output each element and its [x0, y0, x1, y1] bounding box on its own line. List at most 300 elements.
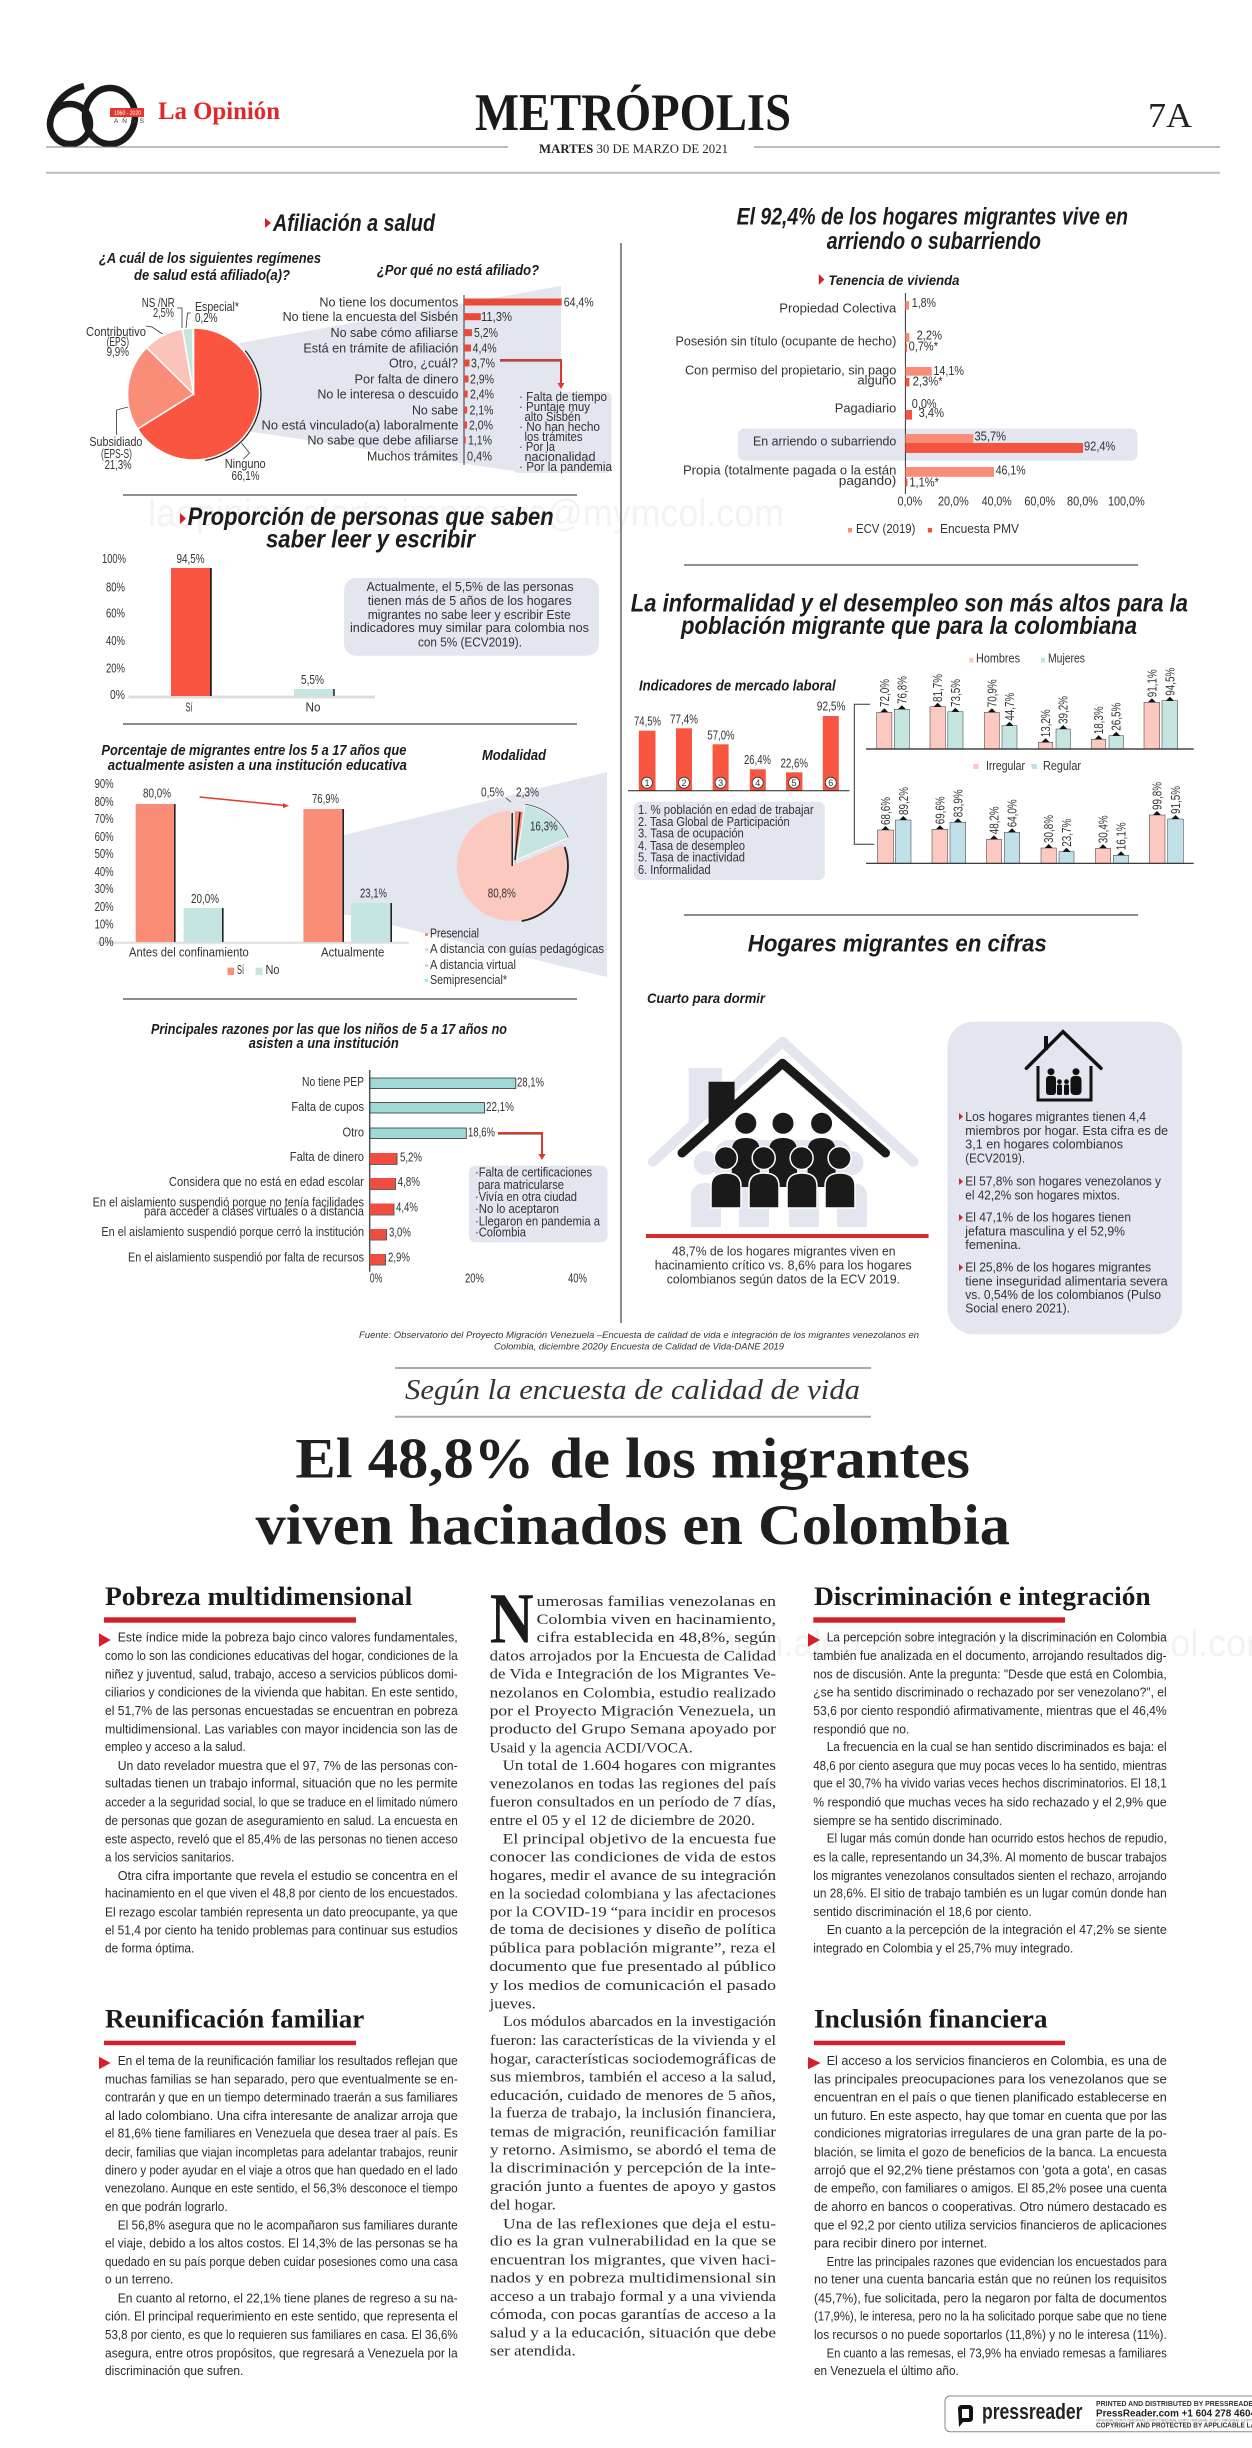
bar chart: por qué no está afiliado: No sabe que debe afiliarse — [307, 434, 458, 448]
body text: Un total de 1.604 hogares con migrantes — [503, 1758, 776, 1774]
body text: cómoda, con pocas garantías de acceso a la — [490, 2307, 776, 2323]
pie chart: regímenes de salud: 2,5% — [153, 306, 174, 320]
body text: El lugar más común donde han ocurrido estos hechos de repudio, — [827, 1831, 1167, 1846]
bar chart: hombres y mujeres: 76,8% — [895, 676, 909, 704]
bar chart: por qué no está afiliado — [262, 295, 594, 465]
pie chart: regímenes de salud: 66,1% — [232, 469, 260, 483]
callout: otras razones: ·Vivía en otra ciudad — [475, 1190, 577, 1204]
body text: respondió que no. — [813, 1721, 909, 1736]
bar chart: tenencia: Posesión sin título (ocupante de hecho) — [676, 335, 896, 349]
bar chart: sabe leer y escribir: 40% — [106, 634, 125, 648]
bar chart: por qué no está afiliado: Muchos trámites — [367, 450, 458, 464]
body text: temas de migración, reunificación familiar — [490, 2125, 776, 2141]
body text: producto del Grupo Semana apoyado por — [490, 1721, 776, 1737]
body text: 53,8 por ciento, es que lo requieren sus familiares en casa. El 36,6% — [105, 2327, 458, 2342]
bar chart: tenencia: 2,2% — [917, 328, 942, 342]
body text: como lo son las condiciones educativas del hogar, condiciones de la — [105, 1648, 458, 1663]
arrow: descenso — [200, 797, 289, 808]
drop cap: N — [490, 1579, 534, 1659]
legend: modalidad — [425, 927, 604, 987]
callout: otras razones: alto Sisbén — [524, 410, 581, 424]
headline block — [256, 1368, 1010, 1557]
bar chart: hombres y mujeres: 72,0% — [878, 679, 892, 707]
body text: sultadas tienen un trabajo informal, situación que no les permite — [105, 1776, 458, 1791]
main title: El 48,8% de los migrantes — [295, 1428, 970, 1491]
body text: de ahorro en bancos o cooperativas. Otro número destacado es — [814, 2199, 1167, 2214]
text: hacinamiento crítico: colombianos según datos de la ECV 2019. — [667, 1271, 900, 1286]
body text: por la COVID-19 “para incidir en procesos — [490, 1905, 776, 1921]
body text — [105, 2053, 458, 2378]
body text: en Venezuela el último año. — [814, 2363, 959, 2378]
body text: en la sociedad colombiana y las afectaciones — [490, 1886, 776, 1902]
bar chart: asistencia: 20% — [95, 900, 114, 914]
bar chart: asistencia: Actualmente — [321, 946, 384, 960]
callout: otras razones: · Puntaje muy — [519, 400, 591, 414]
bar chart: indicadores de mercado laboral — [628, 700, 850, 791]
bar chart: tenencia: 40,0% — [982, 494, 1012, 508]
body text: los migrantes venezolanos consultados sienten el rechazo, arrojando — [813, 1868, 1167, 1883]
text: jefatura del hogar: femenina. — [965, 1237, 1021, 1252]
bar chart: asistencia: No — [266, 963, 280, 977]
bar chart: por qué no está afiliado: 0,4% — [467, 450, 492, 464]
bar chart: tenencia: 80,0% — [1067, 494, 1098, 508]
legend box: indicadores: 1. % población en edad de trabajar — [638, 803, 814, 817]
bar chart: por qué no está afiliado: 1,1% — [468, 434, 492, 448]
bar chart: por qué no está afiliado: 3,7% — [471, 356, 495, 370]
logo: 60 años — [50, 86, 145, 144]
bar chart: irregular y regular: 69,6% — [933, 796, 947, 824]
bar chart: tenencia — [676, 293, 1145, 508]
bar chart: tenencia: 46,1% — [996, 463, 1026, 477]
bar chart: sabe leer y escribir: 20% — [106, 662, 125, 676]
body text: Este índice mide la pobreza bajo cinco valores fundamentales, — [118, 1630, 458, 1645]
body text: sentido discriminación el 18,6 por ciento. — [813, 1904, 1032, 1919]
bar chart: indicadores de mercado laboral: 6 — [828, 778, 833, 788]
body text: la fuerza de trabajo, la inclusión financiera, — [490, 2106, 776, 2122]
bar chart: hombres y mujeres: 91,1% — [1145, 669, 1159, 697]
subheading: regímenes — [99, 250, 321, 284]
heading: proporción de personas — [180, 503, 554, 554]
body text: educación, cuidado de menores de 5 años, — [490, 2088, 776, 2104]
body text: contrarán y que en un tiempo determinado traerán a sus familiares — [105, 2090, 458, 2105]
bar chart: por qué no está afiliado: 4,4% — [473, 342, 497, 356]
pie chart: modalidad: 0,5% — [481, 786, 504, 800]
text: miembros por hogar: (ECV2019). — [965, 1151, 1025, 1166]
body text: Entre las principales razones que evidencian los encuestados para — [827, 2254, 1167, 2269]
icon: arrow — [99, 1633, 111, 1647]
bar chart: razones: No tiene PEP — [302, 1075, 364, 1089]
body text: documento que fue presentado al público — [490, 1959, 776, 1975]
pressreader notice — [1096, 2399, 1252, 2429]
heading: hogares migrantes: Hogares migrantes en cifras — [748, 931, 1047, 958]
bar chart: indicadores de mercado laboral: 1 — [644, 778, 650, 788]
heading: porcentaje de migrantes — [101, 742, 407, 774]
text: inseguridad alimentaria — [959, 1260, 1168, 1316]
text: jefatura del hogar: jefatura masculina y el 52,9% — [964, 1223, 1125, 1238]
body text: Colombia viven en hacinamiento, — [537, 1612, 776, 1628]
body text: gración junto a fuentes de apoyo y gastos — [490, 2179, 776, 2195]
body text: entre el 05 y el 12 de diciembre de 2020. — [490, 1813, 755, 1829]
body text: nezolanos en Colombia, estudio realizado — [490, 1686, 776, 1702]
panel: tenencia de vivienda — [676, 203, 1145, 536]
bar chart: asistencia: 40% — [95, 865, 114, 879]
body text: ción. El principal requerimiento en este sentido, que representa el — [105, 2309, 458, 2324]
bar chart: hombres y mujeres: 81,7% — [931, 674, 945, 702]
bar chart: por qué no está afiliado: No le interesa o descuido — [317, 388, 458, 402]
text: jefatura del hogar: El 47,1% de los hogares tienen — [965, 1210, 1131, 1225]
legend: modalidad: Presencial — [430, 927, 479, 941]
heading: proporción de personas: Proporción de personas que saben — [188, 503, 554, 531]
body text: fueron: las características de la vivienda y el — [490, 2033, 776, 2049]
body text: es la calle, representando un 34,3%. Al momento de buscar trabajos — [813, 1850, 1167, 1865]
bar chart: indicadores de mercado laboral: 2 — [682, 778, 687, 788]
body text: nados y en pobreza multidimensional sin — [490, 2271, 777, 2287]
body text: El 56,8% asegura que no le acompañaron sus familiares durante — [118, 2217, 458, 2232]
article: reunificación familiar — [99, 2004, 458, 2378]
callout: otras razones: nacionalidad — [524, 450, 596, 464]
bar chart: tenencia: 1,1%* — [909, 475, 939, 489]
callout: otras razones — [469, 1166, 608, 1242]
bar chart: sabe leer y escribir: 60% — [106, 607, 125, 621]
main title — [256, 1428, 1010, 1557]
bar chart: asistencia: 30% — [95, 882, 114, 896]
body text: que el 30,7% ha vivido varias veces hechos discriminatorios. El 18,1 — [813, 1776, 1167, 1791]
bar chart: hombres y mujeres: 44,7% — [1003, 693, 1017, 721]
heading: Afiliación a salud: Afiliación a salud — [272, 210, 436, 237]
callout: 5,5% no sabe leer: Actualmente, el 5,5% de las personas — [366, 579, 574, 594]
body text: nos de discusión. Ante la pregunta: "Desde que está en Colombia, — [813, 1666, 1167, 1681]
bar chart: razones: Falta de cupos — [291, 1100, 364, 1114]
bar chart: por qué no está afiliado: Otro, ¿cuál? — [389, 356, 458, 370]
bar chart: indicadores de mercado laboral: 74,5% — [634, 715, 661, 729]
body text: El principal objetivo de la encuesta fue — [503, 1831, 776, 1847]
body text: salud y a la educación, situación que debe — [490, 2325, 776, 2341]
callout: 5,5% no sabe leer: con 5% (ECV2019). — [418, 635, 522, 650]
pie chart: regímenes de salud: Ninguno — [225, 457, 266, 471]
bar chart: por qué no está afiliado: 2,1% — [470, 404, 494, 418]
bar chart: tenencia: 14,1% — [933, 364, 964, 378]
body text — [489, 1594, 777, 2360]
body text: hacinamiento en el que viven el 48,8 por ciento de los encuestados. — [105, 1885, 458, 1900]
bar chart: hombres y mujeres: 26,5% — [1110, 703, 1124, 731]
heading: Reunificación familiar — [105, 2004, 364, 2033]
body text: siempre se ha sentido discriminado. — [813, 1813, 1002, 1828]
bar chart: irregular y regular: Irregular — [986, 759, 1025, 773]
text: miembros por hogar: miembros por hogar. Esta cifra es de — [965, 1123, 1168, 1138]
body text: decir, familias que viajan incompletas para adelantar trabajos, reunir — [105, 2145, 458, 2160]
bar chart: por qué no está afiliado: No sabe — [412, 404, 458, 418]
bar chart: asistencia: 76,9% — [312, 792, 339, 806]
body text: este aspecto, reveló que el 85,4% de las personas no tienen acceso — [105, 1831, 458, 1846]
bar chart: tenencia: pagando) — [839, 474, 896, 488]
heading: principales razones: asisten a una institución — [249, 1035, 399, 1052]
bar chart: tenencia: 92,4% — [1084, 440, 1115, 454]
legend: modalidad: Semipresencial* — [430, 973, 507, 987]
body text: Una de las reflexiones que deja el estu- — [503, 2216, 776, 2232]
bar chart: tenencia: Propiedad Colectiva — [779, 302, 896, 316]
bar chart: por qué no está afiliado: No sabe cómo afiliarse — [330, 326, 458, 340]
body text: condiciones migratorias irregulares de una gran parte de la po- — [814, 2126, 1167, 2141]
bar chart: asistencia: 10% — [95, 918, 114, 932]
bar chart: sabe leer y escribir — [102, 552, 375, 715]
bar chart: razones: 40% — [568, 1272, 587, 1286]
heading: principales razones — [151, 1021, 507, 1052]
bar chart: asistencia: Sí — [237, 963, 244, 977]
bar chart: tenencia: Propia (totalmente pagada o la están — [683, 463, 896, 477]
body text — [105, 1630, 458, 1956]
pie chart: modalidad: 2,3% — [516, 786, 539, 800]
bar chart: sabe leer y escribir: 0% — [110, 688, 125, 702]
icon: pressreader pin — [958, 2405, 973, 2427]
bar chart: tenencia: 2,3%* — [913, 375, 943, 389]
body text: ciliarios y condiciones de la vivienda que habitan. En este sentido, — [105, 1685, 458, 1700]
body text: el 51,7% de las personas encuestadas se encuentran en pobreza — [105, 1703, 458, 1718]
section title: Metrópolis: METRÓPOLIS — [475, 84, 791, 142]
callout: 5,5% no sabe leer — [344, 578, 599, 656]
legend box: indicadores: 3. Tasa de ocupación — [638, 826, 744, 840]
body text: a los servicios sanitarios. — [105, 1850, 234, 1865]
callout: 5,5% no sabe leer: indicadores muy similar para colombia nos — [350, 620, 589, 635]
bar chart: irregular y regular — [866, 759, 1194, 863]
body text — [814, 2053, 1168, 2378]
body text: del hogar. — [490, 2197, 556, 2213]
body text: arrojó que el 92,2% tiene préstamos con 'gota a gota', en casas — [814, 2162, 1167, 2177]
pie chart: regímenes de salud: 21,3% — [105, 458, 132, 472]
panel: informalidad y desempleo — [628, 590, 1194, 880]
body text: dinero y poder ayudar en el viaje a otros que han quedado en el lado — [105, 2162, 458, 2177]
callout: otras razones: · Por la pandemia — [519, 460, 612, 474]
bar chart: razones: En el aislamiento suspendió porque cerró la institución — [101, 1225, 364, 1239]
body text: acceso a un trabajo formal y a una vivienda — [490, 2289, 776, 2305]
page number: 7A — [1148, 96, 1193, 135]
bar chart: asistencia — [95, 777, 409, 977]
body text: 53,6 por ciento respondió afirmativamente, mientras que el 46,4% — [813, 1703, 1167, 1718]
body text: En cuanto a la percepción de la integración el 47,2% se siente — [827, 1922, 1167, 1937]
bar chart: por qué no está afiliado: No tiene la encuesta del Sisbén — [283, 310, 458, 324]
body text: el 81,6% tiene familiares en Venezuela que desea traer al país. Es — [105, 2126, 458, 2141]
bar chart: indicadores de mercado laboral: 92,5% — [817, 700, 846, 714]
bar chart: hombres y mujeres: 73,5% — [949, 679, 963, 707]
bar chart: razones: 20% — [465, 1272, 484, 1286]
body text: discriminación que sufren. — [105, 2363, 243, 2378]
heading: porcentaje de migrantes: actualmente asisten a una institución educativa — [108, 757, 407, 774]
bar chart: sabe leer y escribir: 94,5% — [176, 552, 204, 566]
heading: 92,4% de los hogares — [737, 203, 1128, 255]
bar chart: asistencia: 70% — [95, 812, 114, 826]
bar chart: tenencia: 0,0% — [898, 494, 922, 508]
bar chart: asistencia: 0% — [99, 935, 114, 949]
bar chart: sabe leer y escribir: Sí — [186, 701, 193, 715]
bar chart: sabe leer y escribir: No — [306, 701, 321, 715]
body text: El acceso a los servicios financieros en Colombia, es una de — [827, 2053, 1167, 2068]
body text: conocer las condiciones de vida de estos — [490, 1850, 776, 1866]
body text: pública para población migrante”, reza el — [490, 1941, 776, 1957]
body text: ser atendida. — [490, 2344, 576, 2360]
heading: informalidad: La informalidad y el desempleo son más altos para la — [631, 590, 1188, 618]
bar chart: razones: En el aislamiento suspendió por falta de recursos — [128, 1251, 364, 1265]
panel: razones de inasistencia — [93, 1021, 608, 1286]
bar chart: tenencia: 100,0% — [1108, 494, 1145, 508]
subheading: por qué no está afiliado: ¿Por qué no está afiliado? — [377, 262, 539, 279]
bar chart: asistencia: Antes del confinamiento — [129, 946, 249, 960]
bar chart: asistencia: 50% — [95, 847, 114, 861]
body text: % respondió que muchas veces ha sido rechazado y el 2,9% que — [813, 1795, 1167, 1810]
body text: hogares, medir el avance de su integración — [490, 1868, 777, 1884]
body text: dio es la gran vulnerabilidad en la que se — [490, 2234, 776, 2250]
body text: en que podrán lograrlo. — [105, 2199, 228, 2214]
body text: blación, se limita el gozo de beneficios de la banca. La encuesta — [814, 2145, 1168, 2160]
legend box: indicadores: 4. Tasa de desempleo — [638, 839, 745, 853]
text: hogares venezolanos y mixtos: El 57,8% son hogares venezolanos y — [965, 1174, 1161, 1189]
heading: 92,4% de los hogares: arriendo o subarriendo — [827, 228, 1041, 255]
bar chart: por qué no está afiliado: 11,3% — [481, 310, 512, 324]
text: inseguridad alimentaria: Social enero 2021). — [965, 1301, 1070, 1316]
bar chart: por qué no está afiliado: 2,9% — [470, 372, 494, 386]
pie chart: regímenes de salud: (EPS-S) — [101, 447, 132, 461]
body text: quedado en su país porque deben cuidar posesiones como una casa — [105, 2254, 458, 2269]
bar chart: irregular y regular: 99,8% — [1150, 782, 1164, 810]
heading: Inclusión financiera — [814, 2004, 1048, 2033]
logo: 60 años: 1960 - 2020 — [114, 111, 142, 117]
legend: modalidad: A distancia con guías pedagógicas — [430, 942, 604, 956]
body text: Otra cifra importante que revela el estudio se concentra en el — [118, 1868, 458, 1883]
body text: Un dato revelador muestra que el 97, 7% de las personas con- — [118, 1758, 458, 1773]
bar chart: razones: 28,1% — [517, 1076, 544, 1090]
body text: hogar, características sociodemográficas de — [490, 2051, 776, 2067]
icon: casa con familia — [1026, 1032, 1101, 1100]
icon: casa con personas — [653, 1042, 913, 1227]
legend: tenencia: ECV (2019) — [856, 522, 915, 536]
callout: otras razones — [513, 390, 612, 474]
source note: Colombia, diciembre 2020y Encuesta de Calidad de Vida-DANE 2019 — [494, 1342, 785, 1352]
legend box: indicadores: 5. Tasa de inactividad — [638, 851, 745, 865]
bar chart: hombres y mujeres: 70,9% — [985, 679, 999, 707]
bar chart: asistencia: 60% — [95, 830, 114, 844]
bar chart: tenencia: 1,8% — [912, 296, 936, 310]
bar chart: irregular y regular: 30,4% — [1096, 815, 1110, 843]
bar chart: razones: 2,9% — [388, 1251, 410, 1265]
body text: integrado en Colombia y el 25,7% muy integrado. — [813, 1941, 1073, 1956]
heading: informalidad: población migrante que para la colombiana — [680, 612, 1137, 640]
bar chart: indicadores de mercado laboral: 3 — [718, 778, 723, 788]
body text: de Vida e Integración de los Migrantes Ve- — [490, 1666, 776, 1682]
body text: los recursos o no puede soportarlos (11,8%) y no le interesa (11%). — [814, 2327, 1167, 2342]
bar chart: razones: 22,1% — [486, 1100, 514, 1114]
bar chart: por qué no está afiliado: 64,4% — [564, 296, 594, 310]
bar chart: asistencia: 20,0% — [191, 892, 219, 906]
brand: La Opinión: La Opinión — [158, 98, 280, 125]
heading: porcentaje de migrantes: Porcentaje de migrantes entre los 5 a 17 años que — [101, 742, 406, 759]
bar chart: sabe leer y escribir: 5,5% — [301, 673, 324, 687]
pie chart: regímenes de salud: 0,2% — [195, 311, 218, 325]
body text: venezolano. Aunque en este sentido, el 56,3% desconoce el tiempo — [105, 2181, 458, 2196]
pie chart: regímenes de salud: Especial* — [195, 300, 239, 314]
bar chart: tenencia: Pagadiario — [835, 402, 896, 416]
body text: En cuanto a las remesas, el 73,9% ha enviado remesas a familiares — [827, 2345, 1167, 2360]
newspaper masthead — [46, 84, 1220, 173]
bar chart: razones: Falta de dinero — [290, 1150, 364, 1164]
callout: otras razones: · Falta de tiempo — [519, 390, 607, 404]
bar chart: hombres y mujeres: 94,5% — [1163, 668, 1177, 696]
callout: otras razones: los trámites — [524, 430, 582, 444]
body text: niñez y juventud, salud, trabajo, acceso a servicios públicos domi- — [105, 1666, 458, 1681]
article: inclusión financiera — [808, 2004, 1168, 2378]
bar chart: tenencia: 0,7%* — [909, 340, 938, 354]
legend box: indicadores: 6. Informalidad — [638, 863, 711, 877]
callout: otras razones: ·No lo aceptaron — [475, 1202, 559, 1216]
bar chart: asistencia: 90% — [95, 777, 114, 791]
bar chart: indicadores de mercado laboral: 77,4% — [670, 712, 698, 726]
bar chart: tenencia: 20,0% — [938, 494, 969, 508]
pie chart: modalidad — [457, 786, 568, 921]
body text: La percepción sobre integración y la discriminación en Colombia — [827, 1630, 1167, 1645]
bar chart: indicadores de mercado laboral: 22,6% — [780, 756, 808, 770]
bar chart: tenencia: 3,4% — [919, 406, 944, 420]
body text: (17,9%), le interesa, pero no la ha solicitado porque sabe que no tiene — [814, 2309, 1167, 2324]
text: hogares venezolanos y mixtos — [959, 1174, 1161, 1202]
body text: Usaid y la agencia ACDI/VOCA. — [490, 1740, 693, 1756]
bar chart: hombres y mujeres: Hombres — [976, 652, 1020, 666]
body text: multidimensional. Las variables con mayor incidencia son las de — [105, 1721, 458, 1736]
bar chart: irregular y regular: 83,9% — [951, 789, 965, 817]
callout: otras razones: · No han hecho — [519, 420, 600, 434]
legend: tenencia: Encuesta PMV — [940, 522, 1020, 536]
bar chart: sabe leer y escribir: 100% — [102, 552, 126, 566]
callout: 5,5% no sabe leer: tienen más de 5 años de los hogares — [368, 593, 572, 608]
body text: El rezago escolar también representa un dato preocupante, ya que — [105, 1905, 458, 1920]
callout: otras razones: ·Falta de certificaciones — [475, 1166, 592, 1180]
icon: arrow — [808, 2057, 821, 2069]
bar chart: razones: Considera que no está en edad escolar — [169, 1175, 364, 1189]
subheading: regímenes: de salud está afiliado(a)? — [134, 267, 290, 284]
text: miembros por hogar — [959, 1109, 1168, 1166]
heading: modalidad: Modalidad — [482, 747, 547, 764]
pie chart: regímenes de salud — [86, 296, 266, 483]
icon: arrow — [808, 1633, 820, 1647]
body text: de empeño, con familiares o amigos. El 85,2% posee una cuenta — [814, 2181, 1168, 2196]
pressreader wordmark: pressreader — [982, 2399, 1083, 2424]
body text: de toma de decisiones y diseño de política — [490, 1922, 776, 1938]
subheading: regímenes: ¿A cuál de los siguientes regímenes — [99, 250, 321, 267]
bar chart: irregular y regular: 89,2% — [897, 787, 911, 815]
body text: el 51,4 por ciento ha tenido problemas para continuar sus estudios — [105, 1922, 458, 1937]
text: hacinamiento crítico — [655, 1244, 912, 1286]
panel: proporción que sabe leer y escribir — [102, 503, 599, 715]
bar chart: por qué no está afiliado: No tiene los documentos — [319, 296, 458, 310]
bar chart: por qué no está afiliado: 5,2% — [474, 326, 498, 340]
heading: proporción de personas: saber leer y escribir — [266, 526, 476, 554]
arrow: otro — [500, 360, 564, 389]
body text: el viaje, debido a los altos costos. El 14,3% de las personas se ha — [105, 2236, 458, 2251]
bar chart: indicadores de mercado laboral: 4 — [755, 778, 760, 788]
body text: jueves. — [489, 1996, 536, 2012]
text: inseguridad alimentaria: El 25,8% de los hogares migrantes — [965, 1260, 1151, 1275]
bar chart: por qué no está afiliado: 2,4% — [470, 388, 494, 402]
panel: afiliación a salud — [86, 210, 612, 483]
bar chart: razones — [93, 1070, 587, 1286]
bar chart: tenencia: 60,0% — [1024, 494, 1055, 508]
bar chart: indicadores de mercado laboral: 26,4% — [744, 753, 771, 767]
body text: La frecuencia en la cual se han sentido discriminados es baja: el — [827, 1739, 1167, 1754]
heading: Discriminación e integración — [814, 1582, 1151, 1611]
body text: o un terreno. — [105, 2271, 173, 2286]
logo: 60 años: AÑOS — [114, 116, 145, 125]
body text: En el tema de la reunificación familiar los resultados reflejan que — [118, 2053, 458, 2068]
body text: para recibir dinero por internet. — [814, 2236, 987, 2251]
body text: la discriminación y percepción de la inte- — [490, 2161, 776, 2177]
text: hacinamiento crítico: hacinamiento crítico vs. 8,6% para los hogares — [655, 1257, 912, 1272]
pie chart: modalidad: 16,3% — [530, 820, 558, 834]
